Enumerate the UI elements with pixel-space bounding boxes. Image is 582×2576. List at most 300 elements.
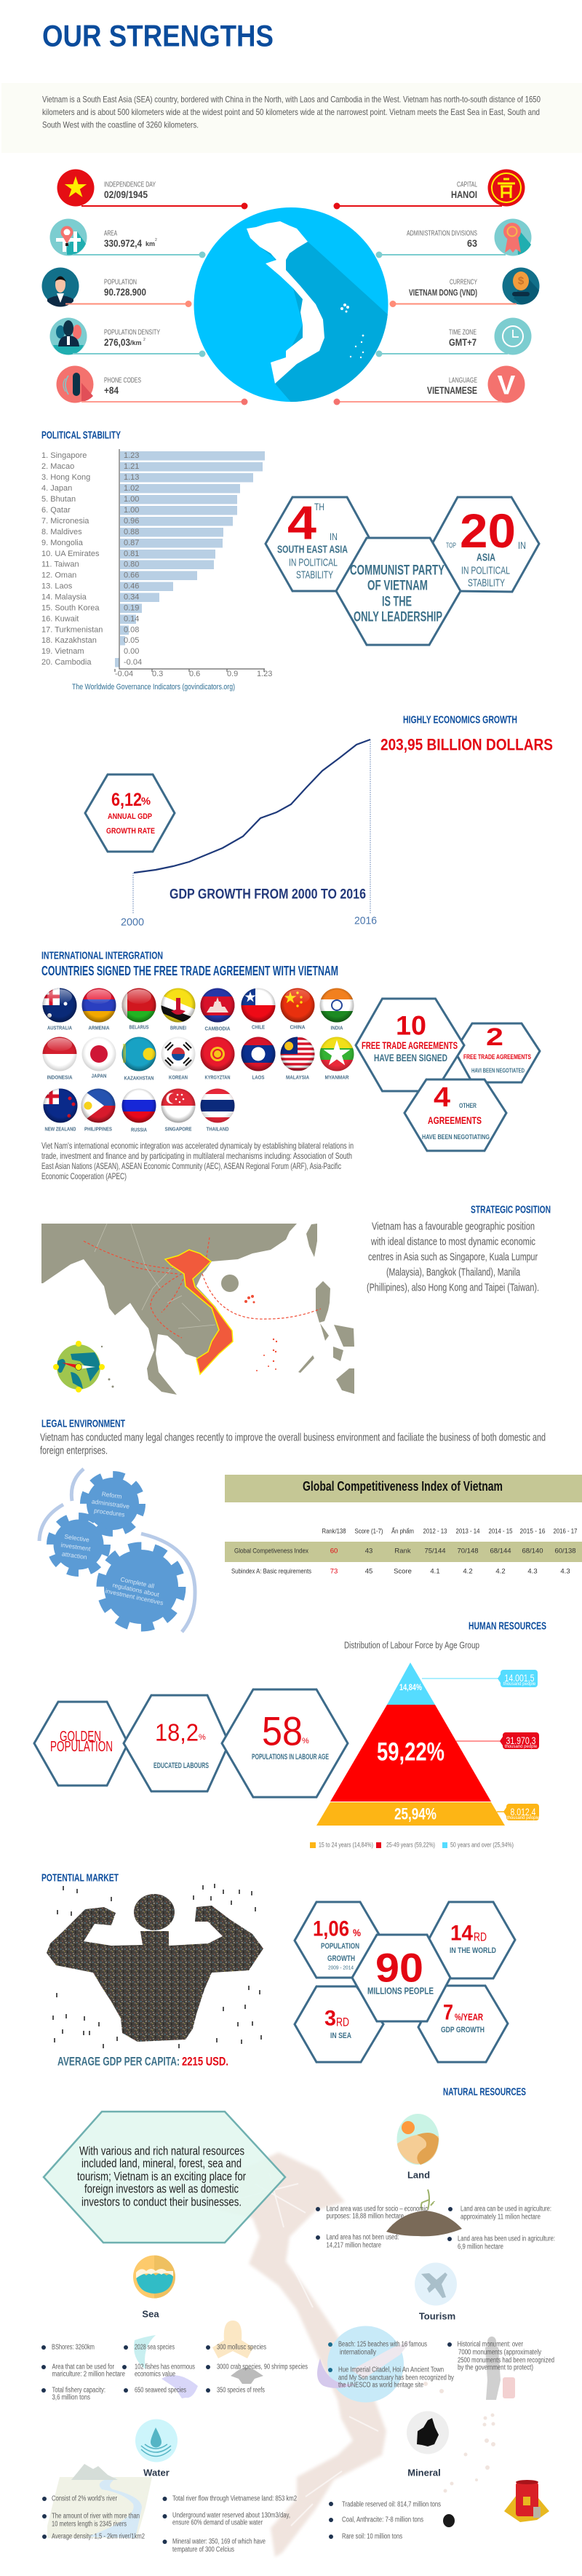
bar chart: political stability ranking: 0.14 xyxy=(124,614,139,623)
resource: sea: 350 species of reefs xyxy=(217,2386,265,2395)
table: global competitiveness index xyxy=(225,1475,582,1575)
hexagon: annual GDP growth rate: GROWTH RATE xyxy=(106,827,155,836)
info: currency: VIETNAM DONG (VND) xyxy=(409,288,477,298)
hexagon: annual GDP growth rate: 6,12 xyxy=(111,790,142,810)
gear: selective investment attraction: attraction xyxy=(61,1550,88,1561)
callout: 14.001,5 xyxy=(498,1670,538,1687)
bar chart: political stability ranking: 14. Malaysia xyxy=(41,593,87,601)
gear: complete regulations: regulations about xyxy=(112,1581,160,1598)
resource: water: Total river flow through Vietnamese land: 853 km2 xyxy=(172,2495,297,2502)
resource: sea: 3,6 million tons xyxy=(52,2393,90,2402)
flag: Philippines: PHILIPPINES xyxy=(84,1125,112,1133)
flag: Cambodia xyxy=(200,988,235,1032)
gear: reform administrative procedures: procedures xyxy=(94,1507,125,1518)
bar chart: political stability ranking: 1.02 xyxy=(124,484,139,493)
bar chart: political stability ranking: 0.3 xyxy=(152,670,163,678)
resource: water: ensure 60% demand of usable water xyxy=(172,2518,263,2527)
hexagon: top 20 in Asia: TOP xyxy=(446,542,456,550)
hexagon: annual GDP growth rate: % xyxy=(141,795,151,808)
gear: selective investment attraction: Selective xyxy=(64,1533,90,1544)
table: global competitiveness index: 2015 - 16 xyxy=(519,1527,546,1536)
resource: sea xyxy=(41,2255,308,2402)
hexagon: golden population: GOLDEN xyxy=(60,1729,101,1745)
hexagon: annual GDP growth rate: ANNUAL GDP xyxy=(108,812,152,821)
info: capital: HANOI xyxy=(451,189,477,200)
hexagon: top 20 in Asia: STABILITY xyxy=(468,576,505,590)
central Vietnam map circle xyxy=(194,207,393,408)
bar chart: political stability ranking: 6. Qatar xyxy=(41,506,71,515)
flag: Cambodia: CAMBODIA xyxy=(205,1025,231,1032)
hexagon: 2 negotiated: 2 xyxy=(486,1023,503,1051)
resource: water: The amount of river with more than xyxy=(52,2513,140,2520)
hexagon: 90 millions people: MILLIONS PEOPLE xyxy=(367,1986,434,1996)
callout: 14.001,5: 14.001,5 xyxy=(505,1672,535,1684)
resource: mineral: Rare soil: 10 million tons xyxy=(342,2533,402,2540)
flag: Korean xyxy=(162,1037,195,1080)
info: currency xyxy=(390,268,540,307)
line chart: GDP growth 2000 to 2016: 2000 xyxy=(121,916,144,929)
resource: land: Land xyxy=(407,2169,430,2181)
gear: selective investment attraction: investment xyxy=(60,1541,92,1553)
icon: coal lump xyxy=(443,2514,455,2527)
bar chart: political stability ranking: 0.88 xyxy=(124,528,139,536)
hexagon: 14th in the world: IN THE WORLD xyxy=(450,1946,496,1955)
hexagon: population growth: GROWTH xyxy=(327,1954,355,1963)
table: global competitiveness index: 2012 - 13 xyxy=(423,1527,447,1536)
table: global competitiveness index: 2016 - 17 xyxy=(553,1527,578,1536)
hexagon: educated labours: EDUCATED LABOURS xyxy=(154,1761,209,1770)
legend: 15 to 24 years (14,84%) xyxy=(319,1842,373,1849)
bar chart: political stability ranking: -0.04 xyxy=(124,658,142,667)
hexagon: population growth xyxy=(295,1902,383,1978)
flag: Chile: CHILE xyxy=(252,1023,265,1031)
hexagon: population in labour age xyxy=(222,1689,348,1797)
hexagon: 10 signed xyxy=(356,999,464,1091)
hexagon: educated labours: % xyxy=(199,1733,206,1742)
info: language: VIETNAMESE xyxy=(427,384,477,396)
flag grid xyxy=(42,988,354,1133)
table: global competitiveness index: 60/138 xyxy=(554,1547,576,1555)
diagram: gears xyxy=(39,1469,195,1632)
gear: complete regulations: investment incentives xyxy=(105,1587,164,1606)
river landscape illustration xyxy=(47,2464,152,2538)
info: population density: 2 xyxy=(143,338,146,342)
flag: Kazakhstan: KAZAKHSTAN xyxy=(124,1074,154,1082)
text: international integration paragraph xyxy=(41,1141,354,1181)
hexagon: 4 other agreements: HAVE BEEN NEGOTIATING xyxy=(422,1133,490,1141)
hexagon: population growth: 1,06 xyxy=(313,1917,349,1941)
flag: Indonesia xyxy=(42,1037,77,1080)
resource: land: 14,217 million hectare xyxy=(326,2242,381,2249)
table: global competitiveness index: 60 xyxy=(330,1547,338,1555)
hexagon: 10 signed: FREE TRADE AGREEMENTS xyxy=(362,1039,458,1051)
intro panel: South West with the coastline of 3260 kilometers. xyxy=(42,119,199,130)
bar chart: political stability ranking: 0.80 xyxy=(124,560,139,569)
legend: 50 years and over (25,94%) xyxy=(450,1842,514,1849)
resource: water: Average density: 1,5 - 2km river/1km2 xyxy=(52,2533,145,2540)
table: global competitiveness index: 4.3 xyxy=(560,1568,570,1575)
chart title: distribution of labour force: Distribution of Labour Force by Age Group xyxy=(344,1639,479,1651)
icon: barrel and gold xyxy=(504,2480,549,2522)
table: global competitiveness index: 43 xyxy=(365,1547,372,1555)
hexagon: 4th in South East Asia: IN POLITICAL xyxy=(289,556,338,569)
flag: Singapore xyxy=(161,1088,196,1133)
resource: land: Land area has not been used: xyxy=(326,2233,399,2242)
icon: compass xyxy=(53,1341,105,1392)
info: administration divisions xyxy=(375,218,531,258)
bar chart: political stability ranking: 0.96 xyxy=(124,517,139,526)
hexagon: population growth: 2009 - 2014 xyxy=(328,1965,354,1971)
info: area: AREA xyxy=(104,230,117,237)
pyramid chart: labour force by age: 14,84% xyxy=(399,1682,422,1692)
table: global competitiveness index: 73 xyxy=(330,1568,338,1575)
average GDP per capita: 2215 USD. xyxy=(182,2054,228,2069)
resource: sea: Total fishery capacity: xyxy=(52,2386,105,2395)
text: legal paragraph xyxy=(40,1431,546,1457)
flag: India: INDIA xyxy=(330,1025,343,1031)
resource: mineral xyxy=(329,2411,549,2540)
hexagon: top 20 in Asia xyxy=(432,497,539,592)
text: legal paragraph: foreign enterprises. xyxy=(40,1444,108,1457)
table: global competitiveness index: Rank xyxy=(394,1547,411,1555)
table: global competitiveness index: Subindex A: Basic requirements xyxy=(231,1568,311,1575)
flag: Philippines xyxy=(81,1088,116,1133)
resource intro hexagon: included land, mineral, forest, sea and xyxy=(81,2156,242,2171)
flag: Kazakhstan xyxy=(122,1037,156,1082)
flag: New Zealand: NEW ZEALAND xyxy=(45,1125,76,1133)
hexagon: 4th in South East Asia: TH xyxy=(314,501,324,512)
bar chart: political stability ranking: 2. Macao xyxy=(41,462,74,471)
hexagon: communist party: COMMUNIST PARTY xyxy=(350,563,445,578)
flag: Brunei: BRUNEI xyxy=(170,1025,186,1031)
hexagon: 2 negotiated xyxy=(455,1023,540,1082)
resource: tourism: Historical monument: over xyxy=(457,2341,524,2348)
flag: Myanmar xyxy=(319,1037,354,1080)
bar chart: political stability ranking: 1.21 xyxy=(124,462,139,471)
table: global competitiveness index: Global Competiveness Index xyxy=(234,1547,308,1555)
globe and traveller illustrations xyxy=(317,2326,515,2402)
line chart: GDP growth 2000 to 2016: 2016 xyxy=(354,914,377,927)
flag: Indonesia: INDONESIA xyxy=(47,1074,73,1080)
info: area xyxy=(49,218,205,258)
bar chart: political stability ranking: 20. Cambodia xyxy=(41,658,92,667)
icon: land xyxy=(397,2114,439,2165)
hexagons: trade agreements xyxy=(356,999,540,1151)
bar chart: political stability ranking: 12. Oman xyxy=(41,571,76,579)
resource: tourism: by the government to protect) xyxy=(458,2364,533,2371)
hexagon: communist party: ONLY LEADERSHIP xyxy=(354,610,442,625)
callout: 31.970,3: thousand people xyxy=(505,1745,538,1749)
flag: Malaysia: MALAYSIA xyxy=(286,1074,309,1080)
chart source: The Worldwide Governance Indicators (govindicators.org) xyxy=(72,683,235,691)
hexagon: top 20 in Asia: 20 xyxy=(460,504,516,558)
resource intro hexagon xyxy=(44,2112,285,2243)
info: population xyxy=(42,268,192,307)
resource intro hexagon: tourism; Vietnam is an exciting place for xyxy=(77,2169,246,2184)
hexagon: 90 millions people: 90 xyxy=(375,1945,423,1990)
resource: mineral: Coal, Anthracite: 7-8 million tons xyxy=(342,2516,423,2524)
resource: sea: 300 mollusc species xyxy=(217,2344,266,2351)
bar chart: political stability ranking: 1.00 xyxy=(124,495,139,504)
flag: Japan xyxy=(81,1037,116,1079)
hexagon: 4th in South East Asia: IN xyxy=(330,531,338,542)
pyramid chart: labour force by age: 25,94% xyxy=(394,1805,436,1823)
bar chart: political stability ranking: 0.34 xyxy=(124,593,139,601)
bar chart: political stability ranking: 1.13 xyxy=(124,473,139,482)
hexagon: population in labour age: 58 xyxy=(262,1708,303,1754)
hexagon: 4th in South East Asia: SOUTH EAST ASIA xyxy=(277,543,348,556)
hexagon: 2 negotiated: HAVI BEEN NEGOTIATED xyxy=(471,1067,525,1074)
hexagon: communist party: OF VIETNAM xyxy=(367,578,428,594)
bar chart: political stability ranking: 3. Hong Kong xyxy=(41,473,90,482)
flag: Russia: RUSSIA xyxy=(131,1127,147,1133)
info: area: km xyxy=(146,240,155,247)
faded Vietnam background map xyxy=(208,2152,495,2557)
info: capital xyxy=(333,169,525,210)
hexagon: 3rd in sea: IN SEA xyxy=(330,2032,351,2040)
hexagon: communist party xyxy=(336,538,461,645)
flag: Belarus: BELARUS xyxy=(129,1023,148,1031)
resource: sea: 3000 crab species, 90 shrimp species xyxy=(217,2363,308,2371)
bar chart: political stability ranking: 15. South Korea xyxy=(41,604,100,613)
bar chart: political stability ranking: 7. Micronesia xyxy=(41,517,89,526)
bar chart: political stability ranking: 0.00 xyxy=(124,647,139,656)
table: global competitiveness index: 4.2 xyxy=(495,1568,506,1575)
hexagon: 3rd in sea: RD xyxy=(336,2015,349,2029)
info: language: LANGUAGE xyxy=(449,377,477,384)
callout: 8.012,4: thousand people xyxy=(507,1816,540,1820)
table: global competitiveness index: Score (1-7) xyxy=(355,1527,383,1536)
hexagon: population in labour age: % xyxy=(302,1737,309,1745)
resource: tourism: Tourism xyxy=(419,2310,455,2322)
hexagon: population growth: POPULATION xyxy=(321,1942,359,1951)
hexagon: 4th in South East Asia: 4 xyxy=(287,496,316,549)
resource: water: tempature of 300 Celcius xyxy=(172,2546,234,2553)
resource: sea: economics value xyxy=(135,2370,175,2379)
hexagon: 14th in the world: 14 xyxy=(450,1922,473,1945)
resource: tourism: internationally xyxy=(340,2348,376,2357)
flag: Chile xyxy=(241,988,276,1031)
icon: mineral xyxy=(407,2411,449,2454)
text: strategic position paragraph xyxy=(367,1220,539,1294)
bar chart: political stability ranking: 0.87 xyxy=(124,539,139,547)
table: global competitiveness index: 2014 - 15 xyxy=(489,1527,512,1536)
gear: reform administrative procedures xyxy=(84,1475,142,1533)
resource: tourism: 7000 monuments (approximately xyxy=(458,2348,541,2357)
flag: Armenia: ARMENIA xyxy=(89,1025,110,1031)
info: phone codes: PHONE CODES xyxy=(104,377,141,384)
info: time zone: GMT+7 xyxy=(449,336,477,348)
hexagon: 3rd in sea xyxy=(295,1986,383,2062)
bar chart: political stability ranking: 0.05 xyxy=(124,636,139,645)
text: international integration paragraph: Viet Nam's international economic integration was accelerated dynamicaly by establishing bilateral relations in xyxy=(41,1141,354,1151)
gear: selective investment attraction xyxy=(50,1516,107,1573)
info: administration divisions: 63 xyxy=(467,237,477,249)
info: area: 2 xyxy=(155,238,157,242)
bar chart: political stability ranking: 19. Vietnam xyxy=(41,647,84,656)
bar chart: political stability ranking: 0.46 xyxy=(124,582,139,591)
info: population density: 276,03 xyxy=(104,336,130,348)
hexagon: 4 other agreements: AGREEMENTS xyxy=(428,1114,482,1126)
flag: Korean: KOREAN xyxy=(169,1074,188,1080)
hexagon: 10 signed: HAVE BEEN SIGNED xyxy=(374,1052,447,1063)
table: global competitiveness index: 68/144 xyxy=(490,1547,511,1555)
resource: tourism: and My Son sanctuary has been recognized by xyxy=(338,2374,454,2382)
table: global competitiveness index: Rank/138 xyxy=(322,1527,346,1536)
info: capital: CAPITAL xyxy=(457,181,477,189)
flag: China: CHINA xyxy=(290,1023,306,1031)
resource: land: purposes: 18,88 million hectare xyxy=(326,2213,404,2220)
hexagons: population facts xyxy=(295,1902,515,2062)
info: language: V xyxy=(498,370,516,400)
flag: Malaysia xyxy=(280,1037,315,1080)
bar chart: political stability ranking: 5. Bhutan xyxy=(41,495,76,504)
bar chart: political stability ranking: 0.19 xyxy=(124,604,139,613)
hexagon: 7 percent GDP growth xyxy=(418,1986,508,2062)
hexagon: 10 signed: 10 xyxy=(396,1010,426,1041)
pyramid chart: labour force by age: 59,22% xyxy=(377,1738,445,1766)
heading: highly economics growth: HIGHLY ECONOMICS GROWTH xyxy=(403,713,517,726)
resource: sea: Area that can be used for xyxy=(52,2363,115,2371)
heading: legal environment: LEGAL ENVIRONMENT xyxy=(41,1418,125,1430)
hexagons: political stability facts xyxy=(266,496,539,645)
callout: 31.970,3: 31.970,3 xyxy=(506,1735,536,1746)
hexagon: 7 percent GDP growth: GDP GROWTH xyxy=(441,2026,485,2034)
icon: sea xyxy=(133,2255,175,2299)
line chart: GDP growth 2000 to 2016 xyxy=(121,740,377,929)
resource intro hexagon: investors to conduct their businesses. xyxy=(81,2195,242,2208)
flag: Kyrgyztan xyxy=(201,1037,234,1080)
table: global competitiveness index: 2013 - 14 xyxy=(455,1527,480,1536)
resource: land: approximately 11 milion hectare xyxy=(461,2213,541,2222)
info: population: 90.728.900 xyxy=(104,286,146,298)
line chart: GDP growth 2000 to 2016: GDP GROWTH FROM 2000 TO 2016 xyxy=(170,887,366,903)
gear: reform administrative procedures: administrative xyxy=(91,1497,130,1510)
resource intro hexagon: foreign investors as well as domestic xyxy=(84,2182,239,2195)
info: population density xyxy=(49,317,205,357)
legend: 25-49 years (59,22%) xyxy=(386,1842,435,1849)
bar chart: political stability ranking: 1.23 xyxy=(124,451,139,460)
text: international integration paragraph: Economic Cooperation (APEC) xyxy=(41,1171,127,1181)
hexagons: golden population xyxy=(34,1689,348,1797)
sea creature illustrations xyxy=(134,2321,263,2398)
resource: tourism: Beach: 125 beaches with 16 famous xyxy=(338,2341,427,2348)
bar chart: political stability ranking xyxy=(41,449,272,678)
icon: tourism xyxy=(415,2262,457,2306)
bar chart: political stability ranking: 4. Japan xyxy=(41,484,72,493)
flag: Armenia xyxy=(81,988,116,1031)
flag: Australia xyxy=(42,988,77,1031)
title: OUR STRENGTHS xyxy=(42,19,274,52)
info: population: POPULATION xyxy=(104,278,137,287)
resource: water: 10 meters length is 2345 rivers xyxy=(52,2520,127,2529)
info: language xyxy=(333,365,525,405)
GDP total value: 203,95 BILLION DOLLARS xyxy=(380,735,553,754)
info: independence day: INDEPENDENCE DAY xyxy=(104,181,156,189)
resource: land: 6,9 million hectare xyxy=(458,2243,503,2251)
bar chart: political stability ranking: 1. Singapore xyxy=(41,451,87,460)
hexagon: top 20 in Asia: ASIA xyxy=(477,552,495,563)
pyramid chart: labour force by age xyxy=(310,1662,540,1849)
flag: Australia: AUSTRALIA xyxy=(47,1025,72,1031)
hexagon: 7 percent GDP growth: 7 xyxy=(443,2000,453,2025)
gear: complete regulations: Complete all xyxy=(120,1575,155,1590)
info: time zone xyxy=(375,317,531,357)
flag: Japan: JAPAN xyxy=(92,1073,106,1079)
resource: water: Mineral water: 350, 169 of which have xyxy=(172,2537,266,2546)
legend xyxy=(310,1842,514,1849)
gear: reform administrative procedures: Reform xyxy=(101,1490,122,1500)
resource: tourism: Hue Imperial Citadel, Hoi An Ancient Town xyxy=(338,2366,444,2374)
bar chart: political stability ranking: 17. Turkmenistan xyxy=(41,626,103,635)
info: administration divisions: ADMINISTRATION DIVISIONS xyxy=(407,230,477,237)
info: phone codes: +84 xyxy=(104,384,119,396)
table: global competitiveness index: 4.1 xyxy=(430,1568,440,1575)
heading: international integration: INTERNATIONAL INTERGRATION xyxy=(41,949,163,962)
info: independence day xyxy=(57,169,247,210)
hexagon: golden population: POPULATION xyxy=(50,1739,113,1755)
table: global competitiveness index: 4.2 xyxy=(463,1568,473,1575)
info: phone codes xyxy=(57,365,247,405)
bar chart: political stability ranking: 18. Kazakhstan xyxy=(41,636,97,645)
info: population density: POPULATION DENSITY xyxy=(104,329,160,336)
crowd forming muscle figure xyxy=(47,1884,263,2048)
hexagon: 90 millions people xyxy=(352,1935,450,2021)
bar chart: political stability ranking: 8. Maldives xyxy=(41,528,82,536)
bar chart: political stability ranking: 13. Laos xyxy=(41,582,73,591)
soil pile xyxy=(386,2189,462,2236)
hexagon: top 20 in Asia: IN xyxy=(518,539,526,551)
resource: land xyxy=(316,2114,555,2251)
flag: Russia xyxy=(121,1088,156,1133)
text: strategic position paragraph: (Malaysia), Bangkok (Thailand), Manila xyxy=(386,1267,520,1278)
bar chart: political stability ranking: 0.66 xyxy=(124,571,139,579)
bar chart: political stability ranking: 0.81 xyxy=(124,550,139,558)
regional map xyxy=(41,1224,354,1395)
hexagon: educated labours xyxy=(124,1695,229,1791)
heading: natural resources: NATURAL RESOURCES xyxy=(443,2086,526,2098)
hexagon: educated labours: 18,2 xyxy=(155,1719,199,1745)
intro panel xyxy=(1,83,582,153)
flag: Laos xyxy=(241,1037,276,1080)
heading: potential market: POTENTIAL MARKET xyxy=(41,1872,119,1884)
flag: Kyrgyztan: KYRGYZTAN xyxy=(205,1074,230,1080)
hexagon: 3rd in sea: 3 xyxy=(324,2006,336,2031)
hexagon: annual GDP growth rate xyxy=(85,774,175,852)
resource: mineral: Mineral xyxy=(407,2468,441,2478)
average GDP per capita: AVERAGE GDP PER CAPITA: xyxy=(57,2054,180,2069)
table: global competitiveness index: 4.3 xyxy=(527,1568,538,1575)
flag: India xyxy=(319,988,354,1031)
resource: water: Underground water reserved about 130m3/day, xyxy=(172,2511,290,2520)
hexagon: 14th in the world xyxy=(428,1902,515,1978)
callout: 31.970,3 xyxy=(500,1732,539,1749)
resource: sea: 650 seaweed species xyxy=(135,2386,186,2395)
flag: Myanmar: MYANMAR xyxy=(324,1074,349,1080)
bar chart: political stability ranking: 0.08 xyxy=(124,626,139,635)
hexagon: 4 other agreements: 4 xyxy=(434,1082,450,1113)
info: area: 330.972,4 xyxy=(104,237,142,249)
callout: 8.012,4 xyxy=(503,1804,540,1820)
table: global competitiveness index: 68/140 xyxy=(522,1547,543,1555)
heading: human resources: HUMAN RESOURCES xyxy=(469,1620,546,1632)
resource: land: Land area was used for socio – economic xyxy=(326,2206,428,2213)
resource: land: Land area can be used in agriculture: xyxy=(461,2206,551,2213)
bar chart: political stability ranking: 10. UA Emirates xyxy=(41,550,100,558)
hexagon: 4th in South East Asia xyxy=(266,496,372,591)
resource: tourism: the UNESCO as world heritage site xyxy=(338,2382,423,2389)
bar chart: political stability ranking: -0.04 xyxy=(115,670,133,678)
